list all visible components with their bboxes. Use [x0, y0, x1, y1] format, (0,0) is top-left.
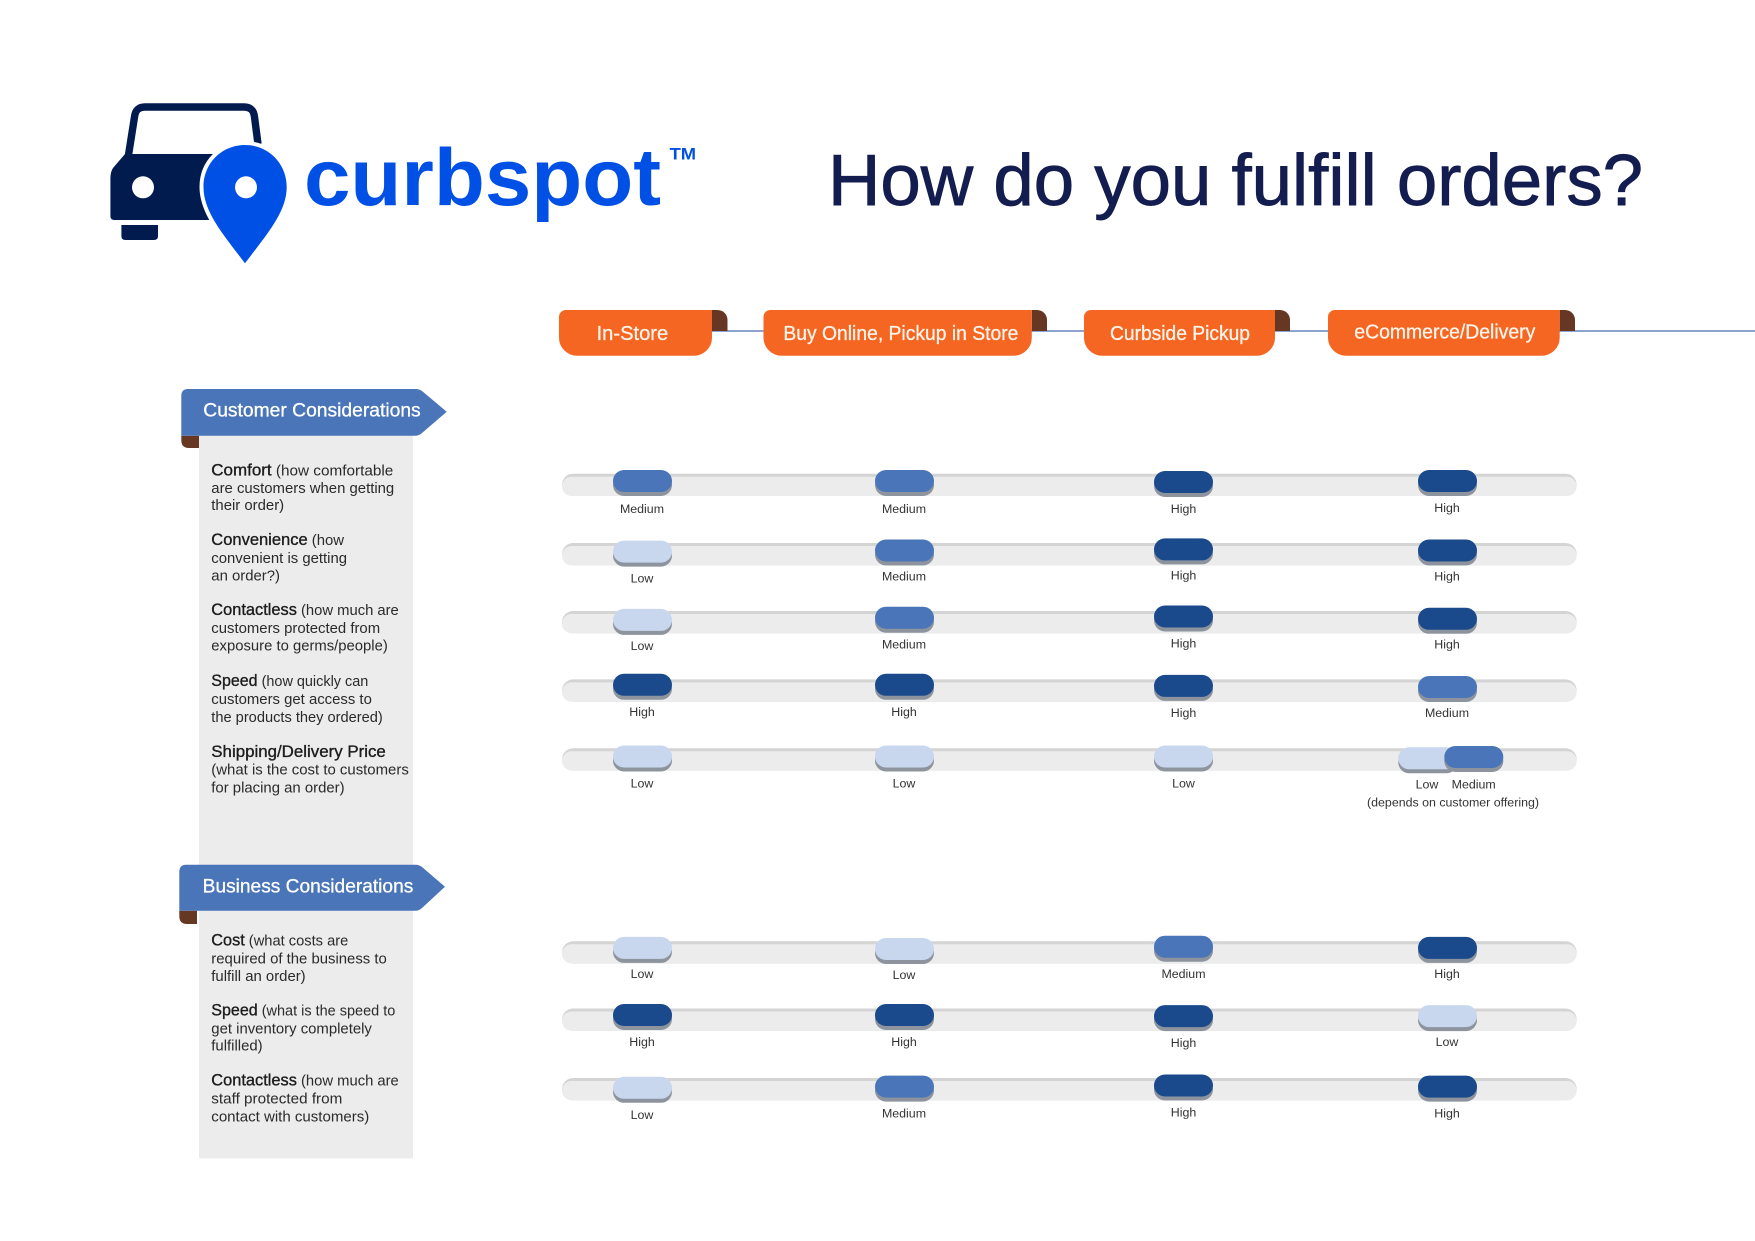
- rating row: Shipping/Delivery Price: Low: [893, 776, 915, 790]
- rating row: Contactless: High: [1434, 638, 1460, 652]
- rating row: Business Contactless: Medium: [882, 1107, 926, 1121]
- rating row: Contactless: Low: [631, 639, 653, 653]
- rating row: Contactless: High: [1171, 637, 1196, 651]
- rating row: Convenience: High: [1171, 568, 1196, 582]
- column header: In-Store: [559, 310, 728, 356]
- item: Convenience: an order?): [211, 569, 280, 585]
- item: Speed: customers get access to: [211, 692, 372, 708]
- banner: Customer Considerations: Customer Considerations: [203, 401, 421, 422]
- rating row: Shipping/Delivery Price: Medium: [1452, 778, 1496, 792]
- column header: Curbside Pickup: Curbside Pickup: [1110, 323, 1250, 345]
- rating row: Business Speed: High: [1171, 1036, 1196, 1050]
- icon: car with location pin: [110, 107, 287, 263]
- banner: Business Considerations: Business Considerations: [203, 876, 413, 897]
- rating row: Comfort: Medium: [620, 502, 664, 516]
- rating row: Cost: Medium: [1161, 967, 1206, 981]
- item: Shipping/Delivery Price: [211, 743, 409, 796]
- rating row: Comfort: High: [1434, 501, 1460, 515]
- column header: Curbside Pickup: [1084, 310, 1290, 356]
- text: customer considerations list: [211, 462, 409, 796]
- rating row: Comfort: High: [1171, 502, 1196, 516]
- item: Contactless: customers protected from: [211, 621, 380, 637]
- item: Convenience: convenient is getting: [211, 551, 347, 567]
- item: Speed: Speed (what is the speed to: [211, 1002, 395, 1020]
- item: Comfort: are customers when getting: [211, 481, 394, 497]
- item: Cost: [211, 932, 387, 985]
- rating row: Cost: Low: [631, 967, 653, 981]
- column header: eCommerce/Delivery: [1328, 310, 1575, 356]
- rating row: Shipping/Delivery Price: Low: [1416, 778, 1438, 792]
- rating row: Speed: Medium: [1425, 706, 1469, 720]
- logo: curbspot: [110, 107, 696, 263]
- item: Cost: Cost (what costs are: [211, 932, 348, 950]
- item: Speed: the products they ordered): [211, 710, 383, 726]
- logo wordmark: curbspot: [304, 133, 661, 223]
- column header: In-Store: In-Store: [597, 323, 668, 345]
- item: Contactless: exposure to germs/people): [211, 638, 388, 654]
- rating row: Business Speed: Low: [1436, 1035, 1458, 1049]
- item: Comfort: [211, 462, 394, 514]
- rating row: Cost: Low: [893, 968, 915, 982]
- rating row: Business Contactless: Low: [631, 1108, 653, 1122]
- rating row: Speed: High: [1171, 706, 1196, 720]
- rating row: Shipping/Delivery Price: [562, 746, 1577, 810]
- item: Cost: required of the business to: [211, 952, 387, 968]
- rating row: Cost: [562, 936, 1577, 982]
- item: Contactless: [211, 601, 399, 654]
- item: Contactless: staff protected from: [211, 1092, 342, 1108]
- item: Shipping/Delivery Price: (what is the cost to customers: [211, 762, 409, 778]
- rating row: Business Speed: High: [629, 1035, 655, 1049]
- item: Shipping/Delivery Price: Shipping/Delivery Price: [211, 743, 386, 761]
- rating row: Comfort: [562, 470, 1577, 516]
- rating row: Speed: High: [891, 705, 917, 719]
- item: Contactless: contact with customers): [211, 1110, 369, 1126]
- item: Convenience: Convenience (how: [211, 531, 344, 549]
- item: Convenience: [211, 531, 347, 585]
- rating row: Convenience: Low: [631, 572, 653, 586]
- banner: Business Considerations: [179, 865, 445, 924]
- rating row: Convenience: [562, 538, 1577, 586]
- header connector line: [712, 330, 1755, 332]
- rating row: Comfort: Medium: [882, 502, 926, 516]
- item: Cost: fulfill an order): [211, 969, 306, 985]
- rating row: Business Contactless: [562, 1074, 1577, 1122]
- banner: Customer Considerations: [181, 389, 447, 448]
- item: Comfort: Comfort (how comfortable: [211, 462, 393, 480]
- item: Speed: [211, 672, 383, 726]
- rating row: Contactless: [562, 606, 1577, 653]
- item: Speed: fulfilled): [211, 1038, 263, 1054]
- rating row: Business Speed: [562, 1004, 1577, 1050]
- rating row: Speed: [562, 674, 1577, 720]
- rating row: Shipping/Delivery Price: Low: [1172, 776, 1195, 790]
- item: Contactless: Contactless (how much are: [211, 1072, 399, 1090]
- rating row: Business Contactless: High: [1171, 1106, 1196, 1120]
- text: business considerations list: [211, 932, 399, 1126]
- rating row: Shipping/Delivery Price: Low: [631, 776, 653, 790]
- column header: Buy Online, Pickup in Store: [764, 310, 1047, 356]
- title: How do you fulfill orders?: [828, 141, 1643, 221]
- trademark mark: TM: [670, 144, 696, 163]
- rating row: Convenience: High: [1434, 569, 1460, 583]
- item: Contactless: [211, 1072, 399, 1126]
- column header: Buy Online, Pickup in Store: Buy Online, Pickup in Store: [783, 323, 1018, 345]
- rating row: Shipping/Delivery Price: (depends on customer offering): [1367, 796, 1539, 810]
- panel: considerations background: [199, 435, 413, 1158]
- rating row: Contactless: Medium: [882, 638, 926, 652]
- rating row: Business Contactless: High: [1434, 1107, 1460, 1121]
- item: Shipping/Delivery Price: for placing an order): [211, 780, 345, 796]
- rating row: Speed: High: [629, 705, 655, 719]
- item: Contactless: Contactless (how much are: [211, 601, 399, 619]
- rating row: Business Speed: High: [891, 1035, 917, 1049]
- item: Speed: get inventory completely: [211, 1022, 372, 1038]
- item: Comfort: their order): [211, 498, 284, 514]
- item: Speed: Speed (how quickly can: [211, 672, 368, 690]
- column header: eCommerce/Delivery: eCommerce/Delivery: [1354, 321, 1535, 343]
- rating row: Cost: High: [1434, 967, 1460, 981]
- item: Speed: [211, 1002, 395, 1054]
- rating row: Convenience: Medium: [882, 569, 926, 583]
